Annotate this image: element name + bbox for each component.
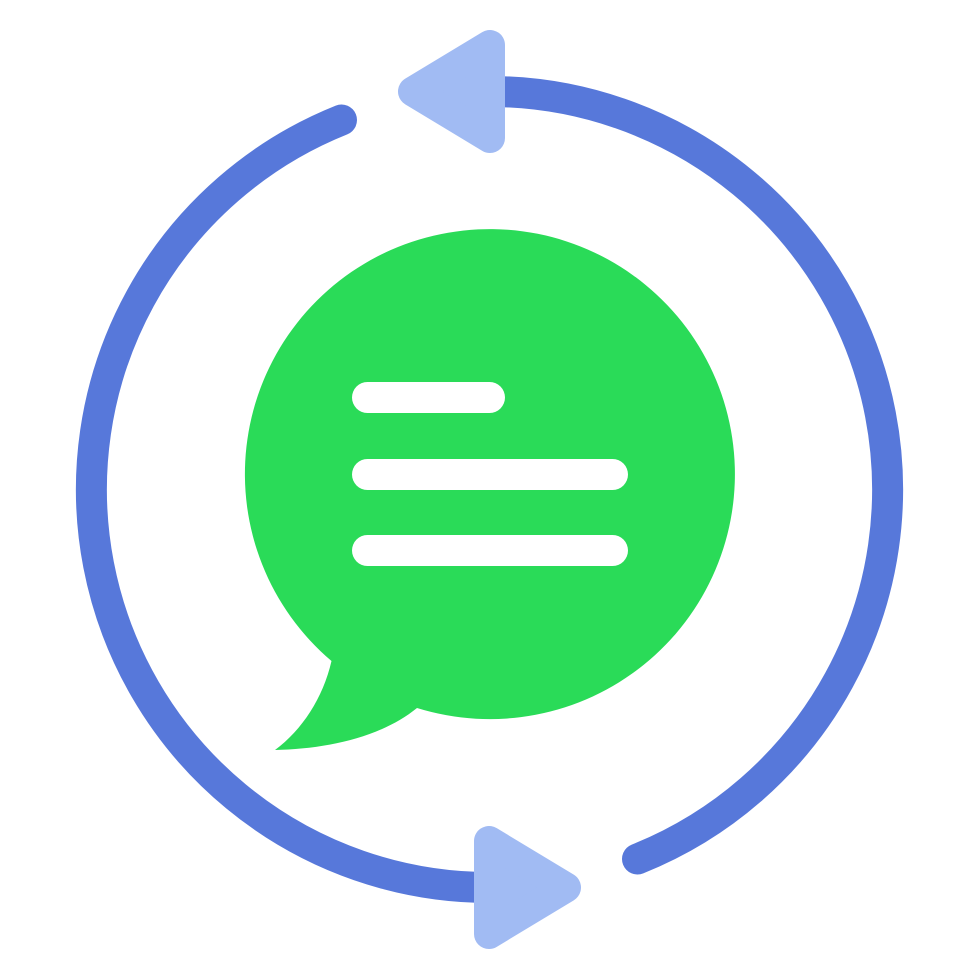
- arc: lower-left cycle arrow shaft: [91, 120, 489, 888]
- arc: upper-right cycle arrow shaft: [490, 91, 888, 859]
- text line: middle: [352, 459, 628, 490]
- arrowhead: bottom pointing right: [489, 841, 566, 934]
- text line: bottom: [352, 535, 628, 566]
- text line: short: [352, 382, 505, 413]
- bubble body and tail: [245, 229, 735, 750]
- arrowhead: top pointing left: [413, 45, 490, 138]
- speech bubble: [245, 229, 735, 750]
